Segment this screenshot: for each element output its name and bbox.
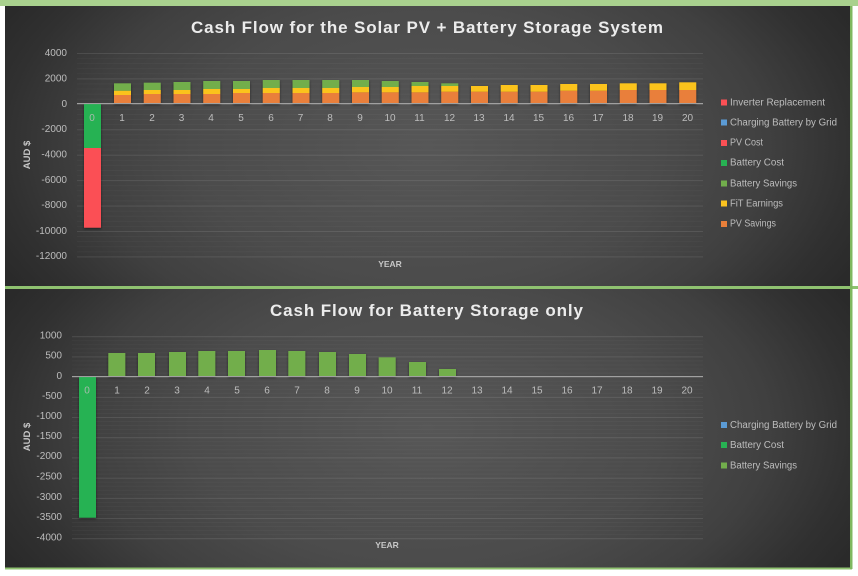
x axis labels: chart 1: 6 <box>268 113 274 124</box>
legend: chart 2: Battery Savings <box>730 460 797 472</box>
legend: chart 2: Battery Cost <box>730 440 784 451</box>
x axis labels: chart 1: 2 <box>149 113 155 124</box>
y axis labels: chart 2: 500 <box>45 350 62 362</box>
legend: chart 1: PV Cost <box>730 138 763 148</box>
bar: year 3 <box>174 82 190 104</box>
bar: year 4 <box>198 351 215 376</box>
x axis labels: chart 1: 18 <box>622 113 634 124</box>
x axis labels: chart 2: 12 <box>441 386 453 396</box>
bar: year 11 <box>409 362 426 376</box>
bar: year 18 <box>620 83 637 104</box>
x axis labels: chart 1: 9 <box>357 113 363 124</box>
legend: chart 2: Charging Battery by Grid <box>730 420 837 431</box>
y axis title: chart 2: AUD $ <box>22 422 33 451</box>
y axis title: chart 1: AUD $ <box>22 140 33 169</box>
heading: chart 2 title: Cash Flow for Battery Storage only <box>270 301 584 320</box>
y axis labels: chart 1: -6000 <box>41 175 67 186</box>
x axis labels: chart 1: 4 <box>208 113 214 124</box>
bar: year 12 <box>441 83 458 104</box>
y axis labels: chart 1: -2000 <box>41 124 67 135</box>
bar: year 17 <box>590 84 607 104</box>
x axis labels: chart 1: 19 <box>652 113 663 124</box>
bar: year 1 <box>108 353 125 376</box>
bar: year 20 <box>679 82 696 104</box>
bar: year 0 battery cost <box>79 376 96 518</box>
legend: chart 1: Battery Savings <box>730 178 797 190</box>
x axis labels: chart 2: 3 <box>174 386 180 396</box>
x axis labels: chart 1: 20 <box>682 113 693 124</box>
bars: chart 2 <box>79 350 456 518</box>
bar: year 1 <box>114 83 131 104</box>
bar: year 5 <box>228 351 245 376</box>
y axis labels: chart 1 <box>36 48 67 262</box>
x axis labels: chart 2: 1 <box>114 386 120 396</box>
bar: year 13 <box>471 86 488 104</box>
y axis labels: chart 2: 0 <box>56 371 62 382</box>
x axis labels: chart 1: 8 <box>327 113 333 124</box>
x axis labels: chart 2: 11 <box>412 386 423 396</box>
bar: year 7 <box>292 80 310 104</box>
x axis labels: chart 1 <box>89 113 693 124</box>
legend: chart 1 <box>721 98 837 230</box>
y axis labels: chart 2: -2000 <box>36 451 62 462</box>
bar: year 3 <box>169 352 186 376</box>
bar: year 11 <box>412 82 428 104</box>
x axis labels: chart 1: 10 <box>384 113 396 124</box>
y axis labels: chart 2: -500 <box>42 391 62 402</box>
x axis labels: chart 2: 6 <box>264 386 270 396</box>
heading: chart 1 title: Cash Flow for the Solar PV + Battery Storage System <box>191 18 663 37</box>
x axis labels: chart 2: 16 <box>561 386 573 396</box>
x axis labels: chart 2: 15 <box>531 386 543 396</box>
bar: year 19 <box>650 83 666 104</box>
bar: year 6 <box>263 80 280 104</box>
bar: year 2 <box>144 83 161 104</box>
y axis labels: chart 2 <box>36 330 62 544</box>
stacked bars: chart 1 <box>84 80 696 228</box>
legend: chart 1: FiT Earnings <box>730 198 783 210</box>
bar: year 10 <box>382 81 399 104</box>
x axis labels: chart 2: 0 <box>84 386 90 396</box>
x axis labels: chart 2: 13 <box>471 386 483 396</box>
bar: year 4 <box>203 81 220 104</box>
legend: chart 1: Battery Cost <box>730 158 784 168</box>
y axis labels: chart 2: -3000 <box>36 492 62 503</box>
x axis labels: chart 1: 11 <box>414 113 425 124</box>
bar: year 10 <box>379 357 396 376</box>
y axis labels: chart 2: 1000 <box>40 330 62 342</box>
x axis labels: chart 1: 13 <box>473 113 485 124</box>
x axis labels: chart 1: 0 <box>89 113 95 124</box>
bar: year 7 <box>288 351 305 376</box>
x axis labels: chart 2: 4 <box>204 386 210 396</box>
x axis labels: chart 1: 16 <box>563 113 574 124</box>
legend: chart 1: Charging Battery by Grid <box>730 118 837 128</box>
x axis labels: chart 2: 18 <box>621 386 633 396</box>
legend: chart 2 <box>721 420 837 472</box>
y axis labels: chart 2: -1000 <box>36 411 62 422</box>
bar: year 0 <box>84 104 101 228</box>
x axis title: chart 2: YEAR <box>375 540 399 550</box>
x axis labels: chart 1: 14 <box>503 113 515 124</box>
bar: year 12 <box>439 369 456 376</box>
y axis labels: chart 1: 0 <box>61 99 67 110</box>
y axis labels: chart 1: -8000 <box>41 200 67 211</box>
y axis labels: chart 2: -3500 <box>36 512 62 523</box>
x axis labels: chart 2: 2 <box>144 386 150 396</box>
x axis labels: chart 1: 3 <box>179 113 185 124</box>
bar: year 2 <box>138 353 155 376</box>
y axis labels: chart 1: -10000 <box>36 226 67 237</box>
x axis labels: chart 2: 8 <box>324 386 330 396</box>
y axis labels: chart 1: -4000 <box>41 150 67 160</box>
x axis labels: chart 1: 1 <box>119 113 125 124</box>
x axis labels: chart 2: 19 <box>651 386 663 396</box>
x axis labels: chart 1: 17 <box>592 113 604 124</box>
y axis labels: chart 2: -1500 <box>36 431 62 442</box>
x axis labels: chart 2: 9 <box>354 386 360 396</box>
x axis labels: chart 1: 5 <box>238 113 244 124</box>
panel: battery storage only cash flow <box>5 289 850 568</box>
y axis labels: chart 2: -2500 <box>36 472 62 482</box>
y axis labels: chart 1: 4000 <box>45 48 67 59</box>
bar: year 8 <box>319 352 336 376</box>
bar: year 9 <box>349 354 366 376</box>
y axis labels: chart 1: 2000 <box>45 74 67 84</box>
bar: year 9 <box>352 80 369 104</box>
bar: year 15 <box>530 85 548 104</box>
bar: year 6 <box>259 350 276 376</box>
x axis labels: chart 2: 14 <box>501 386 513 396</box>
bar: year 14 <box>501 85 518 104</box>
panel: solar PV + battery cash flow <box>5 6 850 286</box>
x axis title: chart 1: YEAR <box>378 259 402 269</box>
x axis labels: chart 2: 10 <box>381 386 393 396</box>
legend: chart 1: Inverter Replacement <box>730 98 825 108</box>
y axis labels: chart 2: -4000 <box>36 532 62 544</box>
y axis labels: chart 1: -12000 <box>36 251 67 262</box>
bar: year 5 <box>233 81 250 104</box>
x axis labels: chart 2: 7 <box>294 386 300 396</box>
x axis labels: chart 1: 7 <box>298 113 304 124</box>
x axis labels: chart 2: 5 <box>234 386 240 396</box>
x axis labels: chart 2: 20 <box>681 386 693 396</box>
x axis labels: chart 1: 12 <box>444 113 455 124</box>
x axis labels: chart 2 <box>84 386 693 396</box>
bar: year 8 <box>322 80 339 104</box>
bar: year 16 <box>560 84 577 104</box>
x axis labels: chart 1: 15 <box>533 113 544 124</box>
x axis labels: chart 2: 17 <box>591 386 603 396</box>
legend: chart 1: PV Savings <box>730 218 776 230</box>
